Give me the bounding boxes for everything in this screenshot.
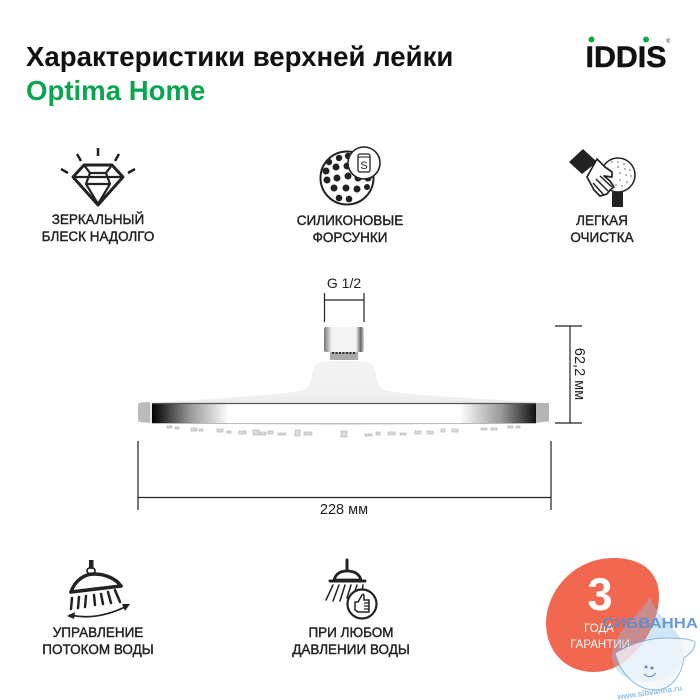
dimension: G 1/2 xyxy=(324,275,364,322)
label: any pressure: ДАВЛЕНИИ ВОДЫ xyxy=(292,642,410,657)
warranty badge: 3 xyxy=(587,569,613,620)
warranty badge: ГОДА xyxy=(584,623,614,635)
title: Характеристики верхней лейки xyxy=(26,41,453,72)
label: easy cleaning: ЛЕГКАЯ xyxy=(576,213,628,228)
watermark: Sibvanna: СИБВАННА xyxy=(602,615,698,632)
label: easy cleaning: ОЧИСТКА xyxy=(570,230,634,245)
label: mirror shine: БЛЕСК НАДОЛГО xyxy=(42,229,154,244)
label: easy cleaning xyxy=(570,213,634,245)
dimension: height 62,2 mm: 62,2 мм xyxy=(571,348,587,400)
label: any pressure xyxy=(292,625,410,658)
logo: ® xyxy=(666,38,671,45)
subtitle: Optima Home xyxy=(26,75,205,106)
warranty badge: ГАРАНТИИ xyxy=(570,639,630,651)
dimension: width 228 mm: 228 мм xyxy=(320,502,368,518)
dimension: height 62,2 mm xyxy=(555,326,587,423)
warranty badge xyxy=(546,558,659,672)
label: any pressure: ПРИ ЛЮБОМ xyxy=(308,625,394,640)
label: mirror shine xyxy=(42,211,154,244)
dimension: width 228 mm xyxy=(138,441,551,518)
icon: silicone nozzles: S xyxy=(360,160,368,172)
label: silicone nozzles xyxy=(297,213,403,245)
dimension: G 1/2: G 1/2 xyxy=(327,275,361,291)
label: silicone nozzles: ФОРСУНКИ xyxy=(313,230,387,245)
label: flow control: УПРАВЛЕНИЕ xyxy=(53,625,143,640)
label: mirror shine: ЗЕРКАЛЬНЫЙ xyxy=(52,212,144,227)
label: flow control xyxy=(42,625,154,658)
label: silicone nozzles: СИЛИКОНОВЫЕ xyxy=(297,213,403,228)
label: flow control: ПОТОКОМ ВОДЫ xyxy=(42,642,154,657)
